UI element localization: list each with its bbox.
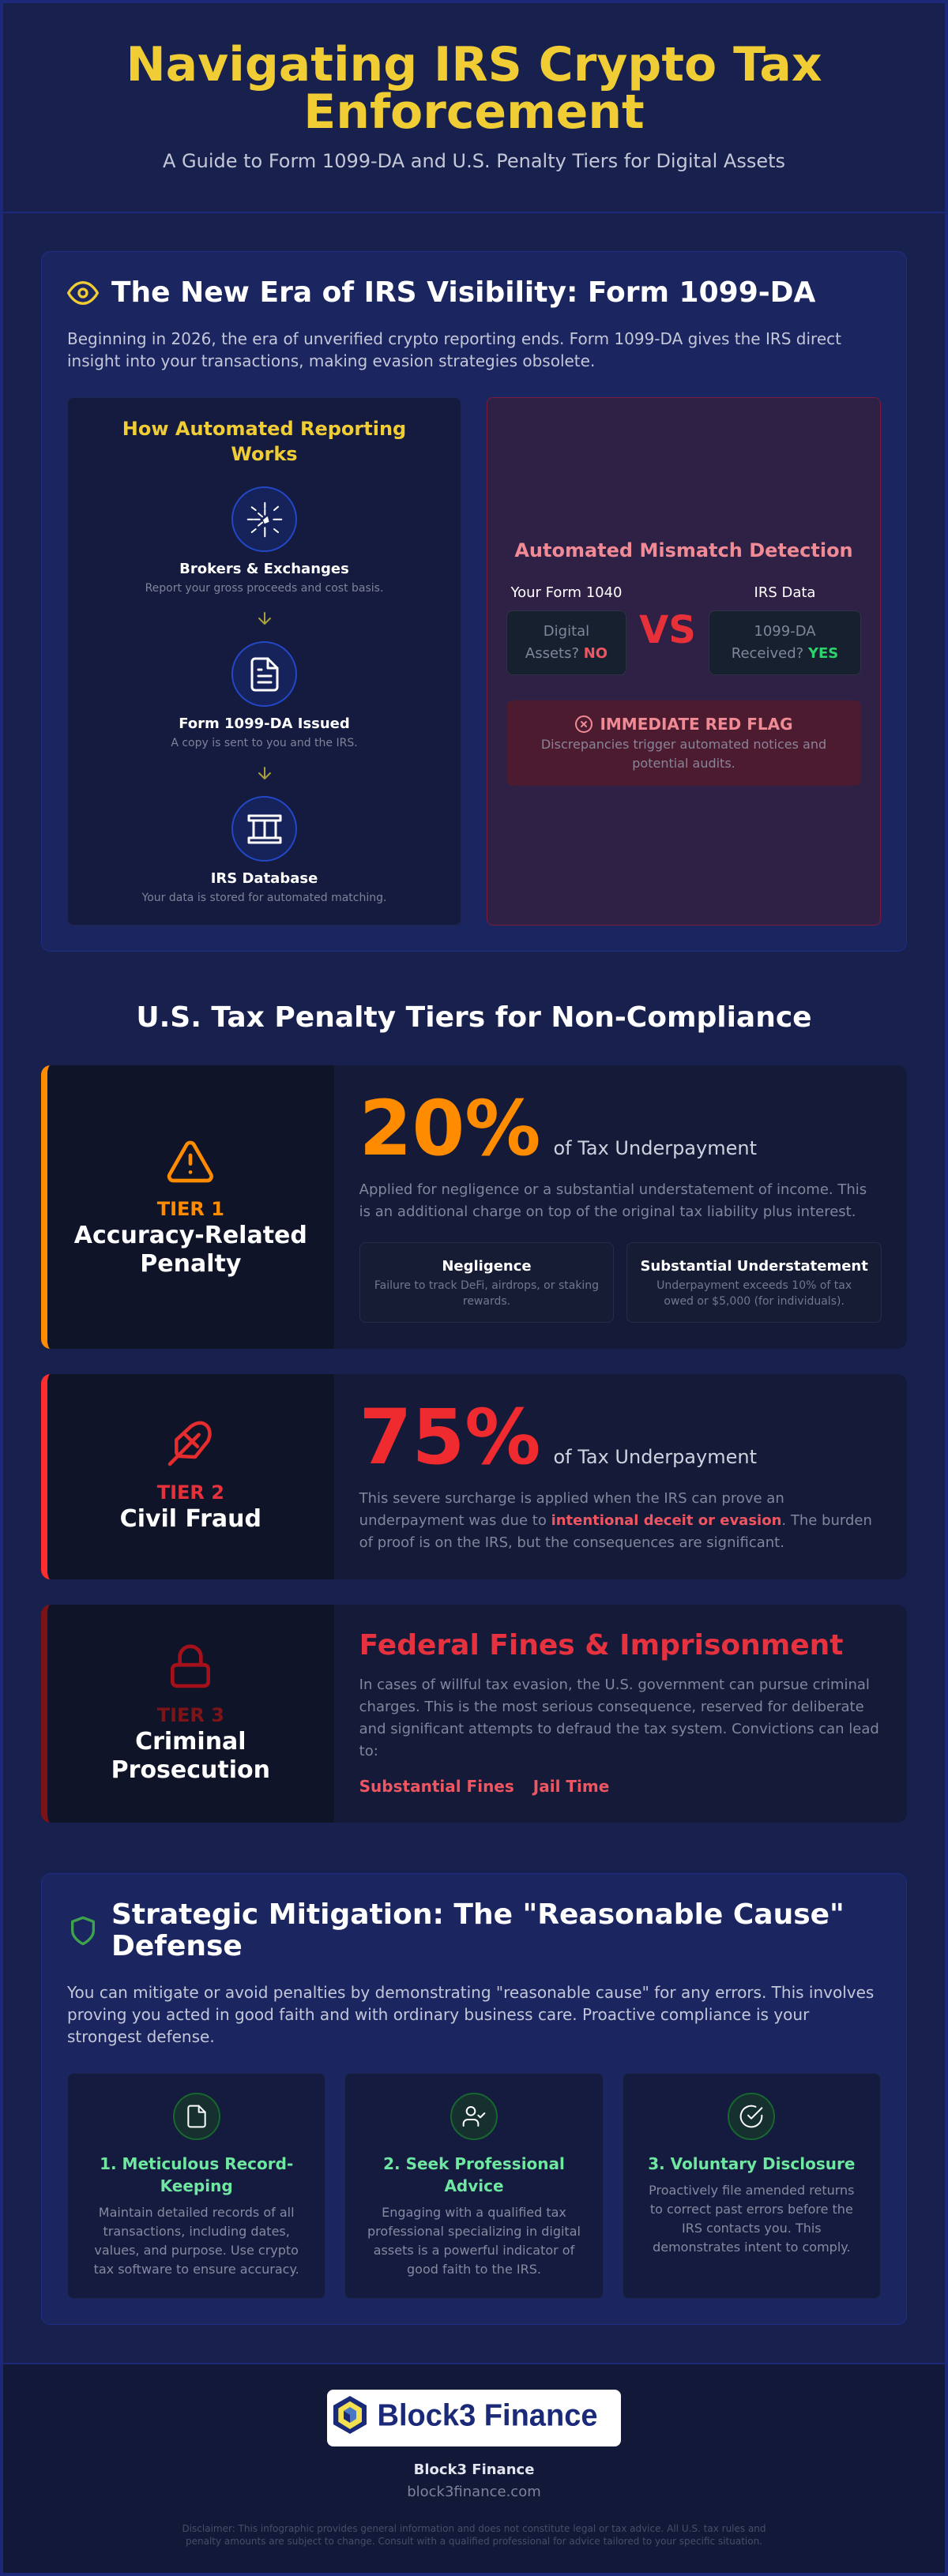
panel: how automated reporting works (67, 397, 461, 926)
step: brokers and exchanges (145, 486, 383, 595)
footer (3, 2363, 945, 2573)
tier 1 details: Applied for negligence or a substantial understatement of income. This is an additional charge on top of the original tax liability plus interest. (359, 1181, 867, 1220)
step: IRS database (142, 796, 386, 904)
IRS data: 1099-DA Received? YES (732, 622, 838, 662)
tier 2 label: TIER 2 (157, 1481, 224, 1504)
tier 3 details (359, 1629, 879, 1796)
intro text: Beginning in 2026, the era of unverified crypto reporting ends. Form 1099-DA gives the IRS direct insight into your transactions, making evasion strategies obsolete. (67, 329, 841, 370)
substantial understatement: Substantial Understatement (640, 1258, 868, 1275)
IRS data (709, 584, 861, 675)
stat: 75 percent: of Tax Underpayment (553, 1446, 757, 1468)
VS: VS (639, 608, 696, 652)
logo: Block3 Finance (378, 2399, 597, 2433)
your form 1040 (506, 584, 626, 675)
callout: immediate red flag: IMMEDIATE RED FLAG (600, 714, 793, 733)
panel: new era of IRS visibility (41, 251, 907, 952)
mitigation intro: You can mitigate or avoid penalties by demonstrating "reasonable cause" for any errors. This involves proving you acted in good faith and with ordinary business care. Proactive compliance is your strongest defense. (67, 1983, 874, 2046)
step: IRS database: IRS Database (211, 870, 318, 887)
step: form 1099-DA issued: Form 1099-DA Issued (179, 715, 350, 732)
icon: eye (67, 281, 99, 305)
consequences: Jail Time (533, 1777, 609, 1796)
card: record keeping (67, 2073, 325, 2299)
icon: burst (231, 486, 297, 552)
step: form 1099-DA issued: A copy is sent to you and the IRS. (171, 737, 358, 749)
card: professional advice: Engaging with a qualified tax professional specializing in digital assets is a powerful indicator of good faith to the IRS. (367, 2205, 581, 2277)
tier 3 details: In cases of willful tax evasion, the U.S. government can pursue criminal charges. This is the most serious consequence, reserved for deliberate and significant attempts to defraud the tax system. Convictions can lead to: (359, 1677, 879, 1759)
title: Navigating IRS Crypto Tax Enforcement (126, 37, 822, 140)
arrow (258, 612, 271, 625)
detection heading: Automated Mismatch Detection (514, 539, 853, 561)
icon: document (231, 641, 297, 707)
flow heading: How Automated Reporting Works (122, 418, 406, 465)
section heading: IRS visibility: The New Era of IRS Visibility: Form 1099-DA (111, 276, 815, 309)
panel: tier 2 (41, 1374, 907, 1579)
step: form 1099-DA issued (171, 641, 358, 749)
substantial understatement: Underpayment exceeds 10% of tax owed or $5,000 (for individuals). (656, 1279, 852, 1308)
card: record keeping: Maintain detailed records of all transactions, including dates, values, and purpose. Use crypto tax software to ensure accuracy. (94, 2205, 299, 2277)
tier 2 details (359, 1393, 872, 1551)
icon: lock (171, 1644, 210, 1688)
stat: 20 percent: 20% (359, 1084, 540, 1173)
IRS data: IRS Data (754, 584, 815, 600)
tier 2 details: This severe surcharge is applied when the IRS can prove an underpayment was due to intentional deceit or evasion. The burden of proof is on the IRS, but the consequences are significant. (359, 1490, 872, 1551)
tier 2 label: Civil Fraud (120, 1505, 261, 1533)
card: record keeping: 1. Meticulous Record-Keeping (100, 2154, 293, 2195)
callout: immediate red flag: Discrepancies trigger automated notices and potential audits. (541, 736, 826, 771)
card: professional advice: 2. Seek Professional Advice (383, 2154, 565, 2195)
panel: automated mismatch detection (487, 397, 881, 926)
header (3, 3, 945, 213)
consequences: Substantial Fines (359, 1777, 514, 1796)
comparison row (506, 584, 861, 675)
negligence: Negligence (442, 1258, 532, 1275)
company name: Block3 Finance (414, 2461, 534, 2478)
arrow (258, 767, 271, 779)
mitigation cards (67, 2073, 881, 2299)
card: voluntary disclosure: 3. Voluntary Disclosure (648, 2154, 855, 2173)
federal fines heading: Federal Fines & Imprisonment (359, 1629, 844, 1662)
tier 3 label: Criminal Prosecution (111, 1728, 270, 1784)
stat: 75 percent (359, 1393, 757, 1481)
callout: immediate red flag (506, 700, 861, 785)
step: brokers and exchanges: Report your gross proceeds and cost basis. (145, 582, 383, 595)
icon: warning triangle (167, 1140, 213, 1183)
tier 2 label (47, 1374, 334, 1579)
panel: tier 3 (41, 1605, 907, 1823)
icon: database (231, 796, 297, 862)
penalty tiers heading: U.S. Tax Penalty Tiers for Non-Compliance (136, 1001, 812, 1034)
tier 1 details (359, 1084, 882, 1323)
your form 1040: Your Form 1040 (510, 584, 623, 600)
tier 1 label: Accuracy-Related Penalty (74, 1221, 307, 1278)
icon: check circle (728, 2093, 775, 2140)
tier 1 label: TIER 1 (157, 1197, 224, 1219)
negligence (359, 1242, 614, 1323)
icon: file (173, 2093, 220, 2140)
icon: feather (167, 1421, 212, 1466)
panel: tier 1 (41, 1065, 907, 1349)
tier 3 label: TIER 3 (157, 1704, 224, 1726)
stat: 20 percent (359, 1084, 757, 1173)
disclaimer: Disclaimer: This infographic provides general information and does not constitute legal or tax advice. All U.S. tax rules and penalty amounts are subject to change. Consult with a qualified professional for advice tailored to your specific situation. (182, 2523, 766, 2547)
card: professional advice (344, 2073, 604, 2299)
card: voluntary disclosure (623, 2073, 881, 2299)
logo (327, 2390, 621, 2446)
substantial understatement (626, 1242, 882, 1323)
card: voluntary disclosure: Proactively file amended returns to correct past errors before the IRS contacts you. This demonstrates intent to comply. (649, 2183, 855, 2255)
mitigation heading: Strategic Mitigation: The "Reasonable Cause" Defense (111, 1898, 845, 1962)
icon: shield (71, 1916, 95, 1946)
tier 3 label (47, 1605, 334, 1823)
your form 1040: Digital Assets? NO (525, 622, 608, 662)
negligence: Failure to track DeFi, airdrops, or staking rewards. (374, 1279, 599, 1308)
subtitle: A Guide to Form 1099-DA and U.S. Penalty Tiers for Digital Assets (163, 150, 785, 172)
panel: strategic mitigation (41, 1873, 907, 2325)
tier 1 label (47, 1065, 334, 1349)
step: IRS database: Your data is stored for automated matching. (142, 892, 386, 904)
step: brokers and exchanges: Brokers & Exchanges (179, 561, 349, 577)
website: block3finance.com (407, 2484, 541, 2500)
icon: user check (450, 2093, 498, 2140)
sub cards (359, 1242, 882, 1323)
stat: 75 percent: 75% (359, 1393, 540, 1481)
consequences (359, 1777, 609, 1796)
stat: 20 percent: of Tax Underpayment (553, 1137, 757, 1159)
two column comparison (67, 397, 881, 926)
